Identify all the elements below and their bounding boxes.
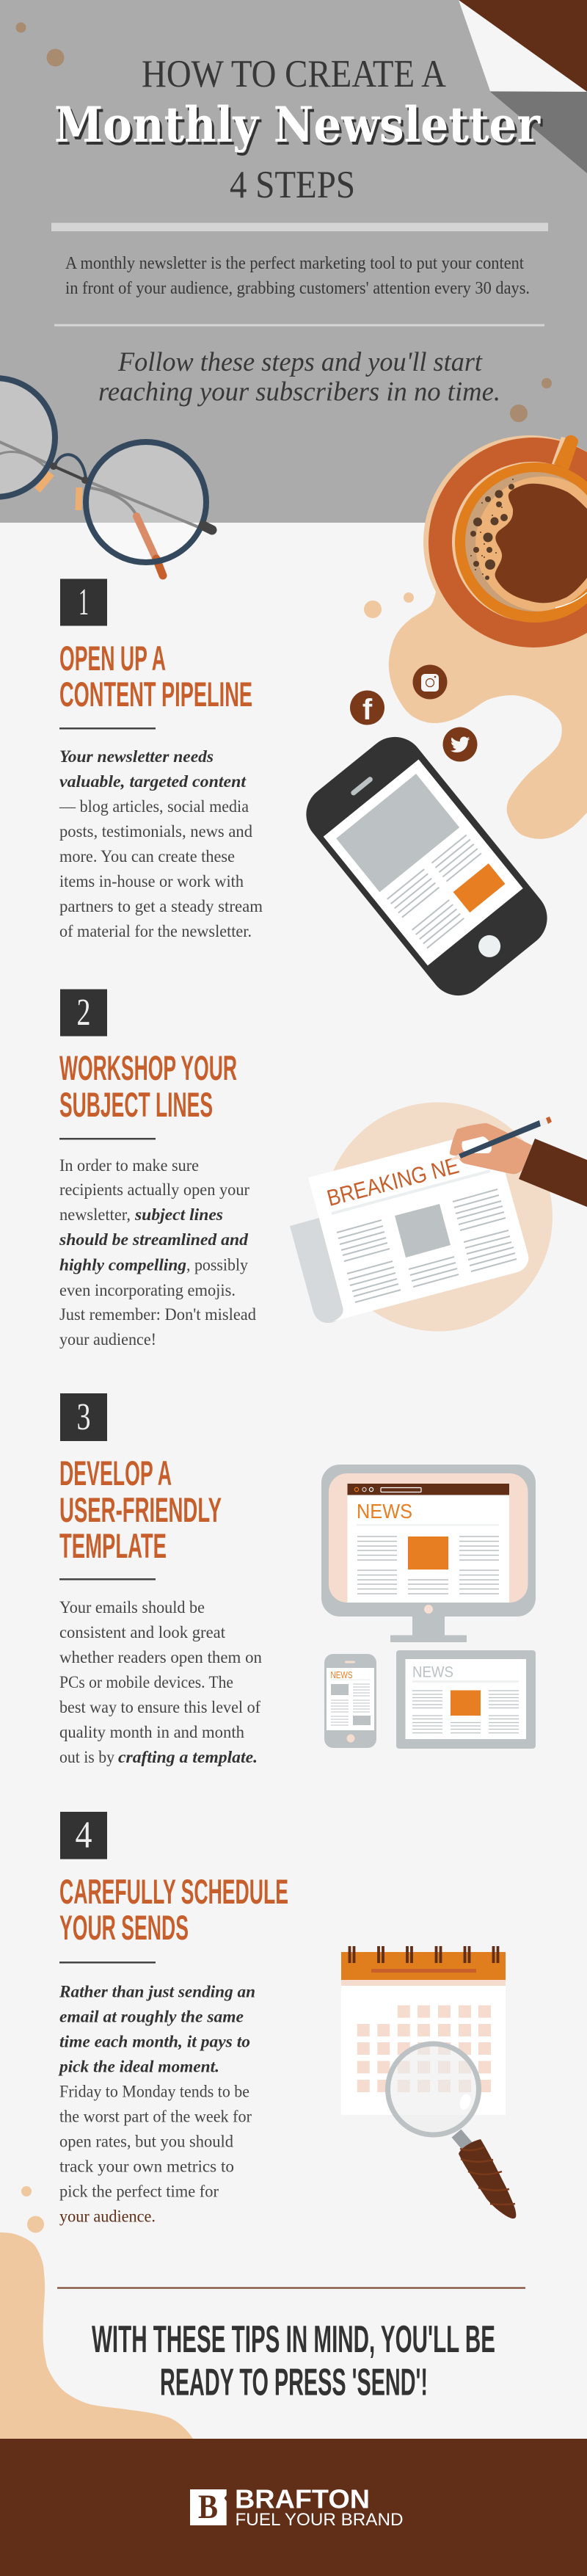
step 4 body text: time each month, it pays to [59, 2032, 250, 2051]
icon: mobile phone: NEWS [330, 1669, 353, 1680]
title: 4 STEPS [230, 164, 355, 206]
step 1 body text: more. You can create these [59, 847, 235, 866]
step 1 body text: items in-house or work with [59, 872, 244, 890]
intro paragraph: in front of your audience, grabbing customers' attention every 30 days. [65, 279, 530, 298]
icon: magnifying glass [387, 2044, 516, 2218]
title: Monthly Newsletter [54, 96, 541, 153]
step 4 body text: the worst part of the week for [59, 2107, 252, 2126]
step 1 heading: OPEN UP A [59, 639, 166, 678]
step 2 body text: subject lines [134, 1205, 223, 1224]
step 2 heading: SUBJECT LINES [59, 1085, 213, 1124]
step 4 [58, 1812, 288, 2226]
step 3 body text: crafting a template. [118, 1748, 258, 1766]
step 2 body text: your audience! [59, 1330, 156, 1349]
step 1 [59, 578, 263, 940]
step 2 body text: Just remember: Don't mislead [59, 1305, 256, 1324]
page curl corner [459, 0, 587, 173]
step 2 number: 2 [76, 992, 91, 1034]
step 2 body text: newsletter, [59, 1205, 131, 1224]
title divider bar [51, 223, 548, 231]
step 2 heading [59, 1048, 237, 1124]
step 2 body text: should be streamlined and [59, 1230, 248, 1249]
step 2 body text: even incorporating emojis. [59, 1281, 236, 1299]
icon: twitter [443, 727, 477, 762]
brafton logo [190, 2484, 404, 2530]
intro tagline [98, 347, 500, 407]
intro paragraph: A monthly newsletter is the perfect marketing tool to put your content [65, 254, 524, 273]
step 1 body text [59, 747, 263, 940]
step 4 body text: pick the ideal moment. [58, 2057, 219, 2076]
step 4 body text: email at roughly the same [59, 2007, 244, 2026]
step 2 [59, 990, 256, 1349]
icon: facebook [350, 690, 384, 726]
brafton logo: FUEL YOUR BRAND [235, 2510, 404, 2530]
step 3 body text: out is by [59, 1748, 114, 1766]
step 2 body text: , possibly [186, 1255, 248, 1274]
step 3 body text: PCs or mobile devices. The [59, 1673, 233, 1691]
step 1 body text: Your newsletter needs [59, 747, 214, 766]
step 4 heading: CAREFULLY SCHEDULE [59, 1872, 288, 1911]
icon: facebook: f [362, 694, 373, 726]
step 1 heading [59, 639, 252, 714]
step 3 [59, 1393, 262, 1766]
step 3 body text: quality month in and month [59, 1723, 244, 1741]
intro tagline: Follow these steps and you'll start [117, 347, 484, 377]
intro paragraph [65, 254, 530, 298]
footer band [0, 2439, 587, 2576]
coffee drops top [16, 22, 552, 422]
icon: newspaper with hand writing: BREAKING NE [324, 1153, 462, 1211]
title [54, 53, 541, 206]
step 3 number [60, 1393, 107, 1441]
step 4 body text: Rather than just sending an [59, 1982, 255, 2001]
step 2 body text: highly compelling [59, 1255, 186, 1274]
step 3 heading: TEMPLATE [59, 1526, 167, 1565]
step 4 body text [58, 1982, 255, 2226]
icon: tablet [396, 1650, 536, 1749]
icon: mobile phone [324, 1654, 376, 1748]
step 2 body text [59, 1156, 256, 1349]
brafton logo: B [198, 2488, 218, 2526]
coffee splash [364, 580, 587, 839]
step 3 body text: consistent and look great [59, 1623, 226, 1641]
step 4 heading [59, 1872, 288, 1947]
icon: newspaper with hand writing [290, 1103, 587, 1332]
step 1 body text: posts, testimonials, news and [59, 822, 252, 841]
step 1 heading: CONTENT PIPELINE [59, 675, 252, 714]
step 1 body text: of material for the newsletter. [59, 922, 252, 940]
spilled coffee bottom left [0, 2186, 193, 2439]
step 3 body text [59, 1598, 262, 1766]
step 3 heading: USER-FRIENDLY [59, 1490, 222, 1529]
step 4 number [60, 1812, 107, 1859]
icon: glasses [0, 378, 212, 576]
brafton logo: BRAFTON [235, 2484, 370, 2514]
step 2 body text: recipients actually open your [59, 1180, 249, 1199]
step 1 number [60, 578, 107, 625]
step 3 heading: DEVELOP A [59, 1454, 172, 1492]
closing message [92, 2318, 495, 2403]
step 4 body text: your audience. [59, 2207, 156, 2226]
step 3 body text: whether readers open them on [59, 1648, 262, 1666]
step 2 number [60, 990, 107, 1037]
intro tagline: reaching your subscribers in no time. [98, 377, 500, 407]
step 4 body text: Friday to Monday tends to be [59, 2082, 249, 2101]
step 2 heading: WORKSHOP YOUR [59, 1048, 237, 1087]
icon: coffee cup [423, 435, 587, 648]
step 3 body text: best way to ensure this level of [59, 1698, 260, 1716]
icon: instagram [412, 665, 448, 699]
step 4 number: 4 [75, 1815, 92, 1856]
step 4 heading: YOUR SENDS [59, 1908, 189, 1947]
step 3 heading [59, 1454, 222, 1565]
icon: calendar [341, 1946, 506, 2115]
step 4 body text: open rates, but you should [59, 2132, 233, 2151]
title: HOW TO CREATE A [142, 53, 446, 95]
step 1 number: 1 [79, 581, 89, 623]
step 1 body text: — blog articles, social media [59, 797, 249, 816]
step 4 body text: track your own metrics to [59, 2157, 234, 2176]
step 2 body text: In order to make sure [59, 1156, 199, 1175]
step 3 number: 3 [76, 1396, 91, 1438]
step 1 body text: valuable, targeted content [59, 772, 247, 791]
icon: smartphone [294, 725, 559, 1007]
icon: desktop monitor: NEWS [357, 1500, 412, 1523]
step 1 body text: partners to get a steady stream [59, 897, 263, 915]
icon: desktop monitor [321, 1465, 536, 1642]
icon: tablet: NEWS [412, 1663, 453, 1681]
step 3 body text: Your emails should be [59, 1598, 205, 1617]
step 4 body text: pick the perfect time for [59, 2182, 219, 2201]
